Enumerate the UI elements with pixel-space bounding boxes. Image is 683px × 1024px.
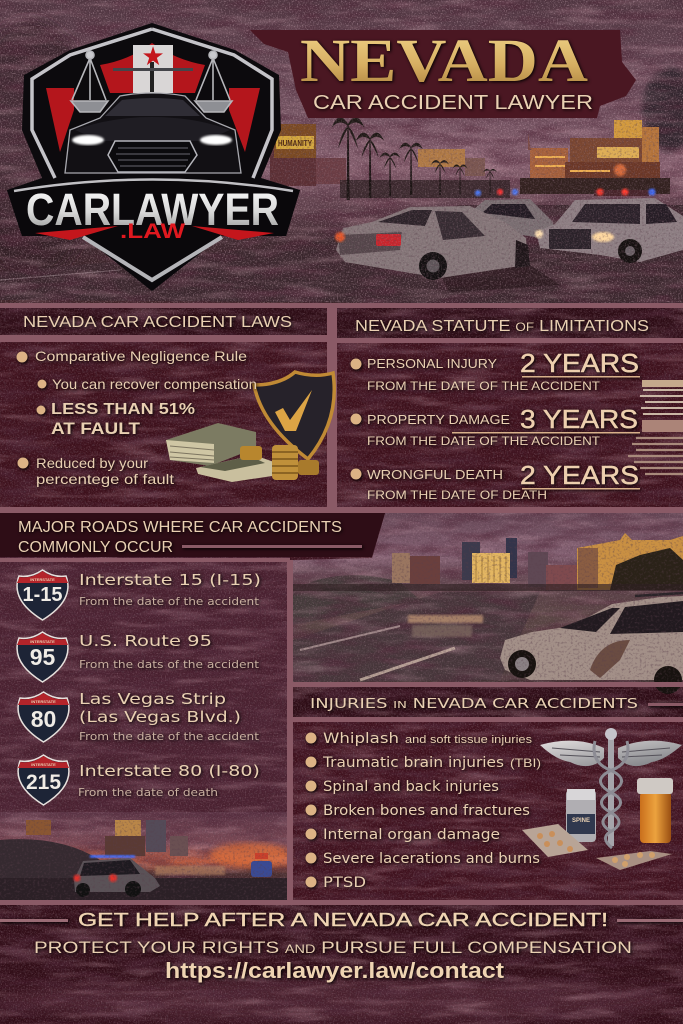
panel: injuries base	[293, 682, 683, 900]
road: US 95: From the dats of the accident	[79, 659, 259, 671]
statute: property damage: FROM THE DATE OF THE ACCIDENT	[367, 434, 601, 448]
blue police car	[251, 853, 272, 877]
statute: personal injury: PERSONAL INJURY	[367, 356, 497, 371]
footer headline: GET HELP AFTER A NEVADA CAR ACCIDENT!	[78, 910, 608, 930]
title: NEVADA: NEVADA	[300, 28, 588, 95]
icon: shield 215	[18, 755, 69, 805]
CARLAWYER wordmark: CARLAWYER	[26, 184, 279, 235]
injuries list	[306, 731, 541, 891]
icon: shield 80: 80	[31, 706, 56, 732]
statute: wrongful death: WRONGFUL DEATH	[367, 467, 503, 482]
statute: personal injury: 2 YEARS	[520, 348, 639, 378]
laws list	[16, 348, 257, 487]
injuries heading: INJURIES IN NEVADA CAR ACCIDENTS	[310, 696, 638, 712]
statute: wrongful death: 2 YEARS	[520, 460, 639, 490]
item: spinal: Spinal and back injuries	[323, 779, 499, 795]
statute list	[350, 348, 640, 502]
item: internal organ: Internal organ damage	[323, 827, 500, 843]
skyline buildings	[293, 533, 683, 591]
header scene objects	[270, 117, 683, 292]
statute: property damage: 3 YEARS	[520, 404, 638, 434]
laws heading: NEVADA CAR ACCIDENT LAWS	[23, 314, 292, 331]
icon: shield 1-15: 1-15	[22, 584, 63, 606]
banner	[7, 178, 300, 291]
panel: footer base	[0, 900, 683, 1024]
bullet: comparative negligence: Comparative Negligence Rule	[35, 348, 247, 364]
item: whiplash: and soft tissue injuries	[405, 734, 533, 746]
road: Interstate 80: From the date of death	[78, 787, 218, 799]
statute heading: NEVADA STATUTE OF LIMITATIONS	[355, 318, 649, 335]
roads heading: COMMONLY OCCUR	[18, 539, 173, 556]
bullet: reduced by fault: Reduced by your	[36, 455, 148, 471]
sunset backdrop	[0, 812, 287, 903]
right casinos	[520, 120, 670, 194]
road scene objects	[0, 820, 290, 903]
icon: shield with check	[254, 372, 334, 459]
item: whiplash: Whiplash	[323, 731, 399, 747]
statute: property damage: PROPERTY DAMAGE	[367, 412, 510, 427]
bullet: less than 51 percent: LESS THAN 51%	[51, 401, 195, 418]
logo badge	[7, 23, 300, 291]
icon: shield 215: INTERSTATE	[31, 762, 56, 767]
section dividers	[0, 303, 683, 905]
back police car	[468, 189, 553, 240]
police car	[535, 188, 683, 263]
.LAW wordmark: .LAW	[120, 220, 185, 243]
icon: shield 1-15	[17, 570, 68, 620]
icon: caduceus and medicine	[522, 728, 682, 870]
road: US 95: U.S. Route 95	[79, 632, 212, 650]
road: US 95	[17, 632, 259, 682]
bullet: reduced by fault	[18, 455, 174, 487]
header backdrop	[0, 0, 683, 305]
statute: personal injury: FROM THE DATE OF THE ACCIDENT	[367, 379, 601, 393]
blister pack left	[522, 824, 588, 857]
item: broken bones: Broken bones and fractures	[323, 803, 530, 819]
panel: laws and statute base	[0, 303, 683, 513]
road highlights	[300, 615, 483, 680]
icon: shield 80	[18, 692, 69, 742]
icon: money and coins	[166, 423, 319, 482]
roads heading: MAJOR ROADS WHERE CAR ACCIDENTS	[18, 519, 342, 536]
flag crest with star	[100, 41, 205, 93]
road: Las Vegas Strip: From the date of the accident	[79, 731, 259, 743]
bullet: less than 51 percent: AT FAULT	[51, 420, 140, 438]
road: Interstate 80: Interstate 80 (I-80)	[79, 762, 260, 780]
footer link: https://carlawyer.law/contact	[165, 958, 505, 983]
road: Las Vegas Strip: (Las Vegas Blvd.)	[79, 708, 241, 726]
icon: paper stack	[628, 380, 683, 474]
roads heading background	[0, 513, 385, 557]
wrecked car	[335, 206, 560, 292]
shield body	[7, 23, 300, 291]
icon: shield 80: INTERSTATE	[31, 699, 56, 704]
left casino	[270, 124, 346, 186]
roads heading	[18, 519, 362, 556]
road: interstate 15	[17, 570, 261, 620]
road: interstate 15: Interstate 15 (I-15)	[79, 571, 261, 589]
scales of justice	[71, 51, 232, 112]
blister pack right	[596, 851, 672, 870]
item: traumatic brain injuries: (TBI)	[510, 756, 541, 770]
left casino: HUMANITY	[278, 139, 313, 148]
crashed SUV	[74, 855, 160, 897]
statute: property damage	[350, 404, 640, 448]
statute: wrongful death: FROM THE DATE OF DEATH	[367, 488, 547, 502]
icon: shield 95: INTERSTATE	[30, 639, 55, 644]
statute: personal injury	[350, 348, 640, 393]
road: Interstate 80	[18, 755, 260, 805]
footer text	[0, 910, 683, 983]
item: PTSD: PTSD	[323, 875, 366, 891]
bullet: reduced by fault: percentege of fault	[36, 471, 174, 487]
icon: shield 1-15: INTERSTATE	[30, 577, 55, 582]
bullet: recover compensation: You can recover compensation	[52, 376, 257, 392]
road: Las Vegas Strip: Las Vegas Strip	[79, 690, 226, 708]
icon: shield 215: 215	[26, 771, 61, 794]
bottle left: SPINE	[572, 818, 590, 824]
logo car	[65, 93, 241, 173]
bottle left	[566, 789, 596, 842]
palms	[332, 117, 497, 200]
panel: roads base	[0, 513, 290, 903]
title panel	[250, 28, 636, 118]
statute: wrongful death	[350, 460, 640, 502]
item: lacerations: Severe lacerations and burns	[323, 851, 540, 867]
item: whiplash	[306, 731, 533, 747]
caduceus	[540, 728, 682, 848]
item: PTSD	[306, 875, 366, 891]
damaged silver car	[500, 593, 683, 694]
subtitle: CAR ACCIDENT LAWYER	[313, 92, 593, 114]
road: Las Vegas Strip	[18, 690, 259, 743]
icon: shield 95: 95	[30, 644, 55, 670]
red accent lines	[35, 226, 274, 240]
icon: shield 95	[17, 632, 68, 682]
pill bottle right	[637, 778, 673, 843]
footer subline: PROTECT YOUR RIGHTS AND PURSUE FULL COMPENSATION	[34, 938, 632, 957]
road: interstate 15: From the date of the accident	[79, 596, 259, 608]
flag crest with star: ★	[141, 41, 165, 71]
item: traumatic brain injuries: Traumatic brain injuries	[322, 755, 504, 771]
skyline backdrop	[293, 513, 683, 682]
red wings	[46, 88, 260, 152]
skyline scene objects	[293, 533, 683, 694]
bullet: less than 51 percent	[36, 401, 195, 438]
